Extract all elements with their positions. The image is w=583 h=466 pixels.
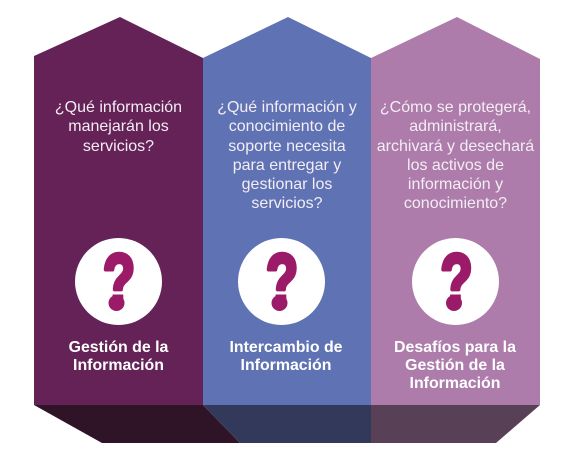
question: mauve panel: información y (408, 176, 503, 193)
question: purple panel: ¿Qué información (55, 99, 182, 116)
icon circle: mauve panel (412, 238, 499, 325)
heading: Desafíos para la Gestión de la Información: Información (410, 375, 500, 392)
question: mauve panel: los activos de (407, 157, 504, 174)
question: purple panel: servicios? (83, 138, 154, 155)
heading: Desafíos para la Gestión de la Información: Gestión de la (405, 357, 505, 374)
shadow: purple (34, 405, 240, 443)
question: blue panel: soporte necesita (228, 138, 346, 155)
heading: Desafíos para la Gestión de la Información (394, 339, 516, 392)
question: blue panel: gestionar los (242, 176, 332, 193)
panel: blue (203, 17, 371, 405)
heading: Desafíos para la Gestión de la Información: Desafíos para la (394, 339, 516, 356)
question: blue panel: servicios? (251, 195, 323, 212)
heading: Gestión de la Información: Gestión de la (69, 339, 168, 356)
question: mauve panel (377, 99, 534, 212)
icon circle: blue panel (238, 238, 325, 325)
question: mauve panel: archivará y desechará (377, 138, 534, 155)
shadow: mauve (371, 405, 540, 443)
question: purple panel: manejarán los (68, 118, 169, 135)
question: mauve panel: conocimiento? (404, 195, 507, 212)
panel: purple (34, 17, 203, 405)
heading: Gestión de la Información: Información (73, 357, 164, 374)
panel: mauve (371, 17, 540, 405)
question: mauve panel: administrará, (409, 118, 502, 135)
question mark icon: mauve panel: ? (440, 240, 473, 320)
heading: Intercambio de Información: Intercambio de (229, 339, 343, 356)
question: mauve panel: ¿Cómo se protegerá, (380, 99, 531, 116)
shadow: blue (203, 405, 371, 443)
question: blue panel: para entregar y (233, 157, 341, 174)
question: blue panel: ¿Qué información y (217, 99, 357, 116)
icon circle: purple panel (75, 238, 162, 325)
question mark icon: blue panel: ? (266, 240, 298, 320)
question: purple panel (55, 99, 182, 155)
heading: Intercambio de Información (229, 339, 343, 374)
question: blue panel: conocimiento de (229, 118, 345, 135)
heading: Intercambio de Información: Información (241, 357, 331, 374)
question: blue panel (217, 99, 357, 212)
question mark icon: purple panel: ? (103, 240, 135, 320)
heading: Gestión de la Información (69, 339, 168, 374)
